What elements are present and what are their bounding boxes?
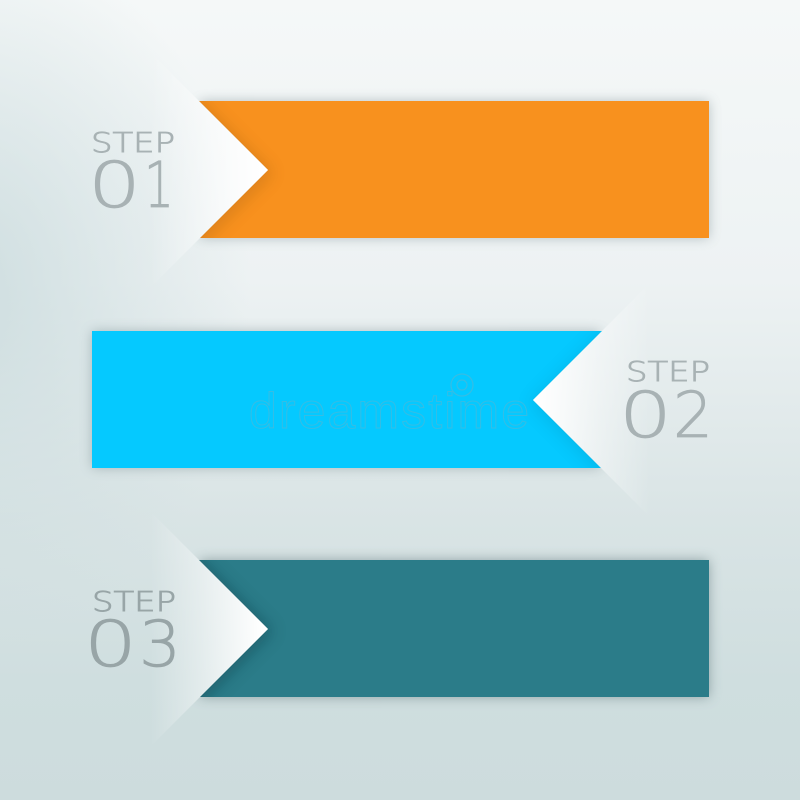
label: step 01: 1	[144, 149, 174, 222]
arrow: step 03	[150, 511, 268, 747]
label: step 02: STEP	[626, 355, 710, 388]
label: step 03: 0	[84, 608, 137, 681]
blue bar	[86, 325, 602, 474]
label: step 02	[619, 355, 713, 452]
label: step 03: 3	[139, 608, 181, 681]
watermark: dreamstime	[249, 383, 529, 439]
orange bar	[198, 94, 716, 244]
label: step 01	[88, 126, 175, 222]
label: step 02: 2	[673, 379, 713, 452]
label: step 01: 0	[88, 149, 141, 222]
arrow: step 01	[150, 52, 268, 288]
arrow: step 02	[533, 282, 651, 518]
label: step 03: STEP	[92, 585, 176, 618]
panel: step 01 banner	[94, 94, 716, 244]
teal bar	[197, 553, 716, 704]
panel: step 02 banner	[86, 325, 708, 486]
panel: step 03 banner	[90, 539, 716, 724]
label: step 01: STEP	[91, 126, 175, 159]
label: step 02: 0	[619, 379, 672, 452]
label: step 03	[84, 585, 181, 681]
